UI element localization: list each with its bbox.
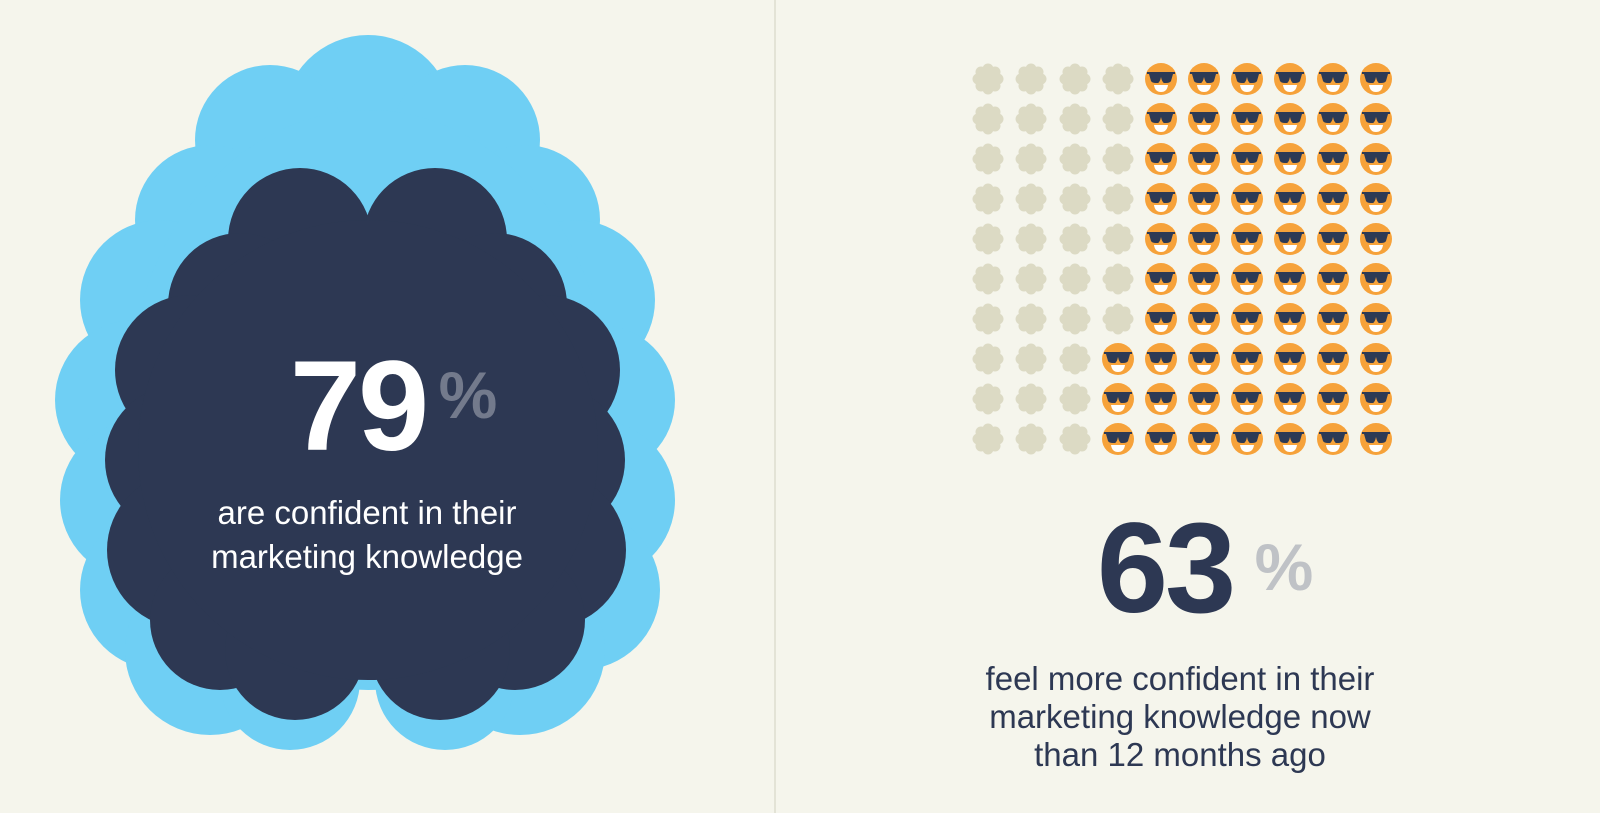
stat 63% <box>1097 497 1313 640</box>
cloud: outer light blue <box>55 35 675 750</box>
cloud: inner dark navy with stat: marketing knowledge <box>211 538 523 575</box>
icon grid: 37 grey flowers, 63 smileys <box>972 63 1392 455</box>
caption: 63%: marketing knowledge now <box>989 698 1371 735</box>
caption: 63%: feel more confident in their <box>986 660 1374 697</box>
cloud: inner dark navy with stat <box>105 168 626 720</box>
stat 63%: 63 <box>1097 497 1233 640</box>
caption: are confident in their <box>217 494 517 531</box>
caption: 63% <box>986 660 1374 773</box>
caption: 63%: than 12 months ago <box>1034 736 1326 773</box>
stat 79%: 79 <box>290 335 426 478</box>
cloud: inner dark navy with stat: % <box>439 358 497 432</box>
stat 63%: % <box>1255 530 1313 604</box>
